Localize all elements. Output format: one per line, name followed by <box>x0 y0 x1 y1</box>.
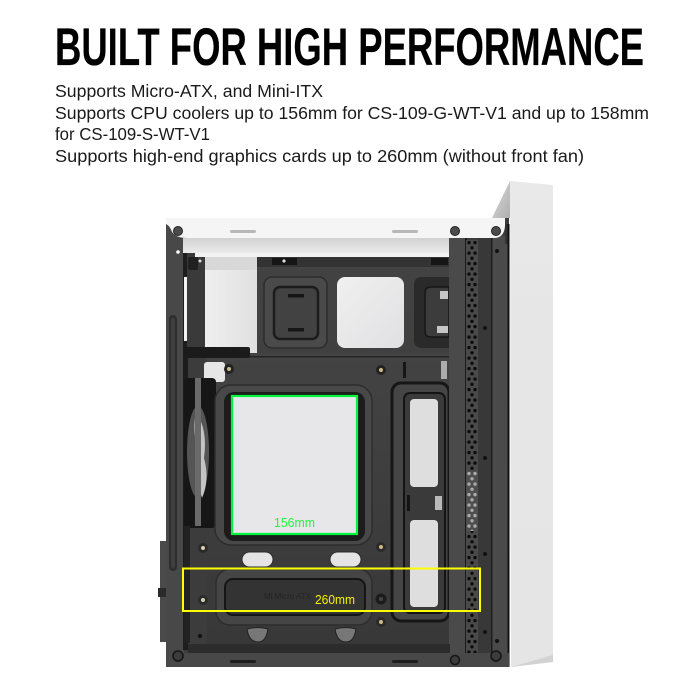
central white window <box>232 396 357 534</box>
fan <box>184 347 250 643</box>
drive cage area <box>187 253 258 353</box>
description text block: for CS-109-S-WT-V1 <box>55 124 210 144</box>
screws and standoffs <box>198 364 386 638</box>
central recess frame <box>215 385 372 545</box>
right vent recess <box>392 383 449 621</box>
CPU cooler clearance callout <box>232 396 357 534</box>
description text block: Supports high-end graphics cards up to 260mm (without front fan) <box>55 146 584 166</box>
case thumb screws <box>173 226 501 664</box>
perforated strip <box>466 240 478 653</box>
description text block <box>55 81 649 166</box>
bottom bar <box>166 644 509 667</box>
graphics card clearance callout <box>183 568 480 611</box>
description text block: Supports CPU coolers up to 156mm for CS-109-G-WT-V1 and up to 158mm <box>55 103 649 123</box>
computer case illustration <box>158 181 553 667</box>
central recess inner <box>224 392 365 541</box>
lower recess <box>216 569 372 625</box>
top white bar <box>166 218 505 257</box>
lower recess: Mi Micro ATX <box>264 592 312 601</box>
front right pillar <box>449 224 510 667</box>
graphics card clearance callout: 260mm <box>315 593 355 607</box>
description text block: Supports Micro-ATX, and Mini-ITX <box>55 81 323 101</box>
tray slot details <box>403 361 447 379</box>
CPU cooler clearance callout: 156mm <box>274 516 315 530</box>
upper white vent <box>337 277 404 348</box>
chassis body <box>166 218 509 667</box>
upper right recess <box>414 277 449 348</box>
upper left recess <box>264 277 327 348</box>
left pillar <box>166 224 188 667</box>
motherboard tray <box>207 257 449 647</box>
small rear window <box>204 362 225 382</box>
half-round tabs <box>247 628 356 642</box>
oval slots <box>242 552 361 567</box>
side panel <box>492 181 553 667</box>
left foot <box>158 541 168 642</box>
